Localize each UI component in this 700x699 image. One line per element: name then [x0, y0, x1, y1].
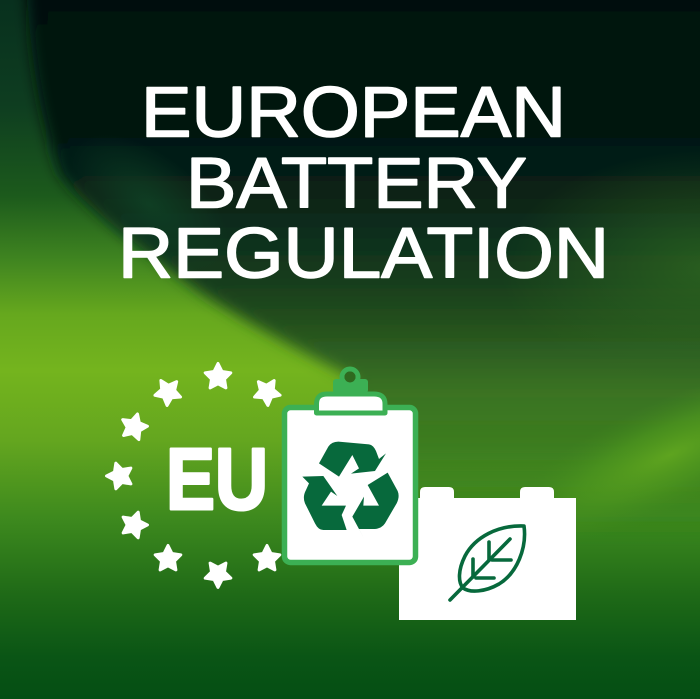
clipboard ring [342, 369, 358, 385]
icon: recycling arrows [302, 442, 399, 538]
clipboard clip [316, 394, 385, 413]
title [118, 74, 609, 294]
title: REGULATION [118, 214, 609, 294]
icon: clipboard with recycling symbol [284, 369, 416, 562]
title: EUROPEAN [141, 74, 566, 152]
title: BATTERY [186, 144, 527, 224]
icon: leaf [450, 526, 525, 600]
clipboard board [284, 408, 416, 562]
icon: battery with leaf [399, 487, 576, 620]
battery body [399, 487, 576, 620]
icon: EU star circle [104, 364, 285, 590]
EU label: EU [166, 431, 268, 528]
